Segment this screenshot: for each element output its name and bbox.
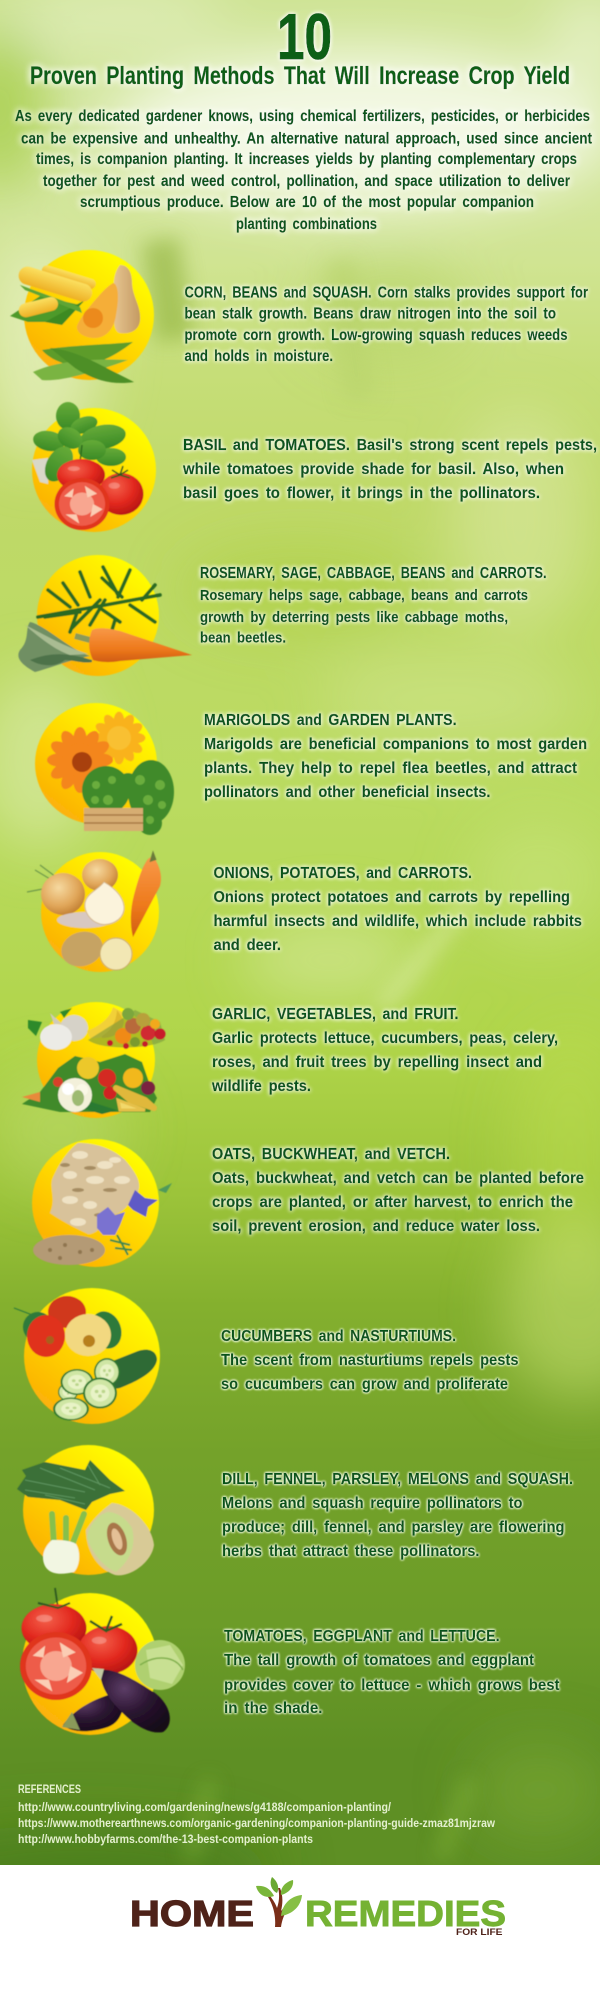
item text: GARLIC, VEGETABLES, and FRUIT. [212, 1006, 458, 1023]
item text [211, 1006, 558, 1095]
icon: garlic, fruit and vegetables [22, 1002, 166, 1118]
panel: tomatoes, eggplant and lettuce [20, 1588, 560, 1735]
logo: Home Remedies for Life [130, 1877, 506, 1938]
references text block: https://www.motherearthnews.com/organic-gardening/companion-planting-guide-zmaz81mjzraw [18, 1816, 496, 1830]
item text: produce; dill, fennel, and parsley are flowering [222, 1519, 564, 1536]
title: number 10: 10 [277, 0, 332, 73]
item text: and holds in moisture. [184, 348, 333, 365]
intro text block [15, 108, 593, 233]
references text block [18, 1782, 496, 1846]
icon: rosemary, sage and carrot [18, 555, 192, 676]
item text: in the shade. [224, 1700, 322, 1717]
item text: MARIGOLDS and GARDEN PLANTS. [204, 712, 456, 729]
item text [184, 284, 588, 365]
item text [200, 565, 546, 646]
item text: The scent from nasturtiums repels pests [221, 1352, 519, 1369]
item text: crops are planted, or after harvest, to enrich the [212, 1194, 573, 1211]
icon: dill, fennel and melon [17, 1445, 154, 1575]
icon: marigolds and plant crate [35, 703, 174, 835]
panel: cucumbers and nasturtiums [14, 1288, 519, 1424]
item text: TOMATOES, EGGPLANT and LETTUCE. [224, 1628, 500, 1645]
intro text block: planting combinations [236, 216, 377, 233]
item text: bean beetles. [200, 630, 286, 646]
item text [212, 1146, 584, 1235]
item text: so cucumbers can grow and proliferate [221, 1376, 508, 1393]
icon: tomatoes, eggplant and lettuce [20, 1588, 185, 1735]
logo word: HOME: HOME [130, 1893, 254, 1934]
panel: basil and tomatoes [32, 402, 597, 532]
icon: basil and tomatoes [32, 402, 156, 532]
item text: herbs that attract these pollinators. [222, 1543, 480, 1560]
references text block: http://www.countryliving.com/gardening/news/g4188/companion-planting/ [18, 1800, 392, 1814]
logo word: REMEDIES: REMEDIES [305, 1893, 506, 1934]
item text: ONIONS, POTATOES, and CARROTS. [214, 865, 472, 882]
item text: wildlife pests. [211, 1078, 311, 1095]
icon: nasturtiums and cucumber [14, 1288, 160, 1424]
item text: Garlic protects lettuce, cucumbers, peas, celery, [212, 1030, 558, 1047]
item text [182, 437, 597, 502]
item text [204, 712, 587, 801]
panel: onions, potatoes and carrots [27, 852, 582, 972]
item text [221, 1328, 519, 1393]
panel: corn, beans and squash [10, 250, 588, 383]
references text block: http://www.hobbyfarms.com/the-13-best-companion-plants [18, 1832, 313, 1846]
item text: basil goes to flower, it brings in the pollinators. [183, 485, 540, 502]
item text [224, 1628, 560, 1717]
item text: pollinators and other beneficial insects. [204, 784, 490, 801]
icon: sprouting tree [256, 1877, 302, 1927]
item text: Onions protect potatoes and carrots by repelling [214, 889, 570, 906]
logo word: FOR LIFE: FOR LIFE [456, 1927, 502, 1938]
item text: The tall growth of tomatoes and eggplant [224, 1652, 535, 1669]
references text block: REFERENCES [18, 1782, 81, 1796]
item text: and deer. [214, 937, 281, 954]
item text: CUCUMBERS and NASTURTIUMS. [221, 1328, 456, 1345]
item text: Melons and squash require pollinators to [222, 1495, 523, 1512]
footer: white band [0, 1865, 600, 2000]
item text: provides cover to lettuce - which grows best [224, 1677, 560, 1694]
icon: onions, potatoes and carrot [27, 852, 161, 972]
item text: growth by deterring pests like cabbage moths, [200, 609, 508, 626]
item text: soil, prevent erosion, and reduce water loss. [212, 1218, 540, 1235]
panel: dill, fennel, parsley, melons and squash [17, 1445, 573, 1575]
panel: marigolds and garden plants [35, 703, 587, 835]
item text: plants. They help to repel flea beetles, and attract [204, 760, 578, 777]
item text [214, 865, 582, 954]
item text: Rosemary helps sage, cabbage, beans and carrots [200, 587, 528, 604]
item text: roses, and fruit trees by repelling insect and [212, 1054, 542, 1071]
panel: oats, buckwheat and vetch [32, 1139, 584, 1267]
panel: garlic, vegetables and fruit [22, 1002, 558, 1118]
panel: rosemary, sage, cabbage, beans and carrots [18, 555, 547, 676]
item text: while tomatoes provide shade for basil. Also, when [182, 461, 564, 478]
item text: OATS, BUCKWHEAT, and VETCH. [212, 1146, 450, 1163]
icon: oats, buckwheat and vetch [32, 1139, 172, 1267]
icon: corn, squash and beans [10, 250, 154, 383]
item text [222, 1471, 573, 1560]
